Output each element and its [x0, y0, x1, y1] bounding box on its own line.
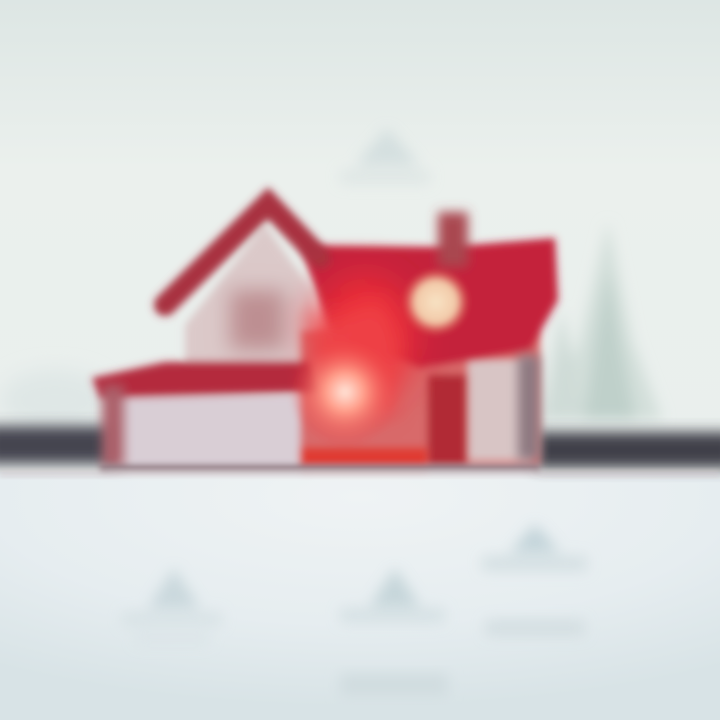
caption block: bottom centre — [340, 674, 448, 696]
icon block: lower right — [482, 524, 587, 636]
fire highlight — [289, 336, 401, 448]
house — [92, 203, 558, 472]
right wall shadow — [518, 355, 540, 460]
ground reflection line — [0, 470, 720, 477]
ground panel — [0, 472, 720, 720]
central red glow — [315, 275, 415, 395]
main red roof — [300, 238, 558, 368]
house walls — [118, 225, 540, 470]
lower porch roof — [92, 362, 318, 398]
glowing window — [402, 268, 470, 336]
dark road band left — [0, 426, 115, 464]
icon block: lower left — [122, 568, 222, 644]
red door column — [428, 375, 466, 465]
red base glow — [302, 448, 427, 470]
background sky — [0, 0, 720, 480]
distant hill left — [0, 370, 110, 430]
icon block: lower centre — [340, 568, 445, 623]
evergreen trees right — [542, 222, 662, 420]
house foundation — [100, 464, 540, 472]
chimney — [438, 212, 468, 267]
glow ray — [300, 300, 400, 420]
upper gable roof — [165, 203, 320, 305]
dark road band right — [535, 432, 720, 468]
window upper gable — [230, 290, 285, 350]
icon: top house outline — [340, 128, 430, 184]
left post — [102, 385, 124, 467]
